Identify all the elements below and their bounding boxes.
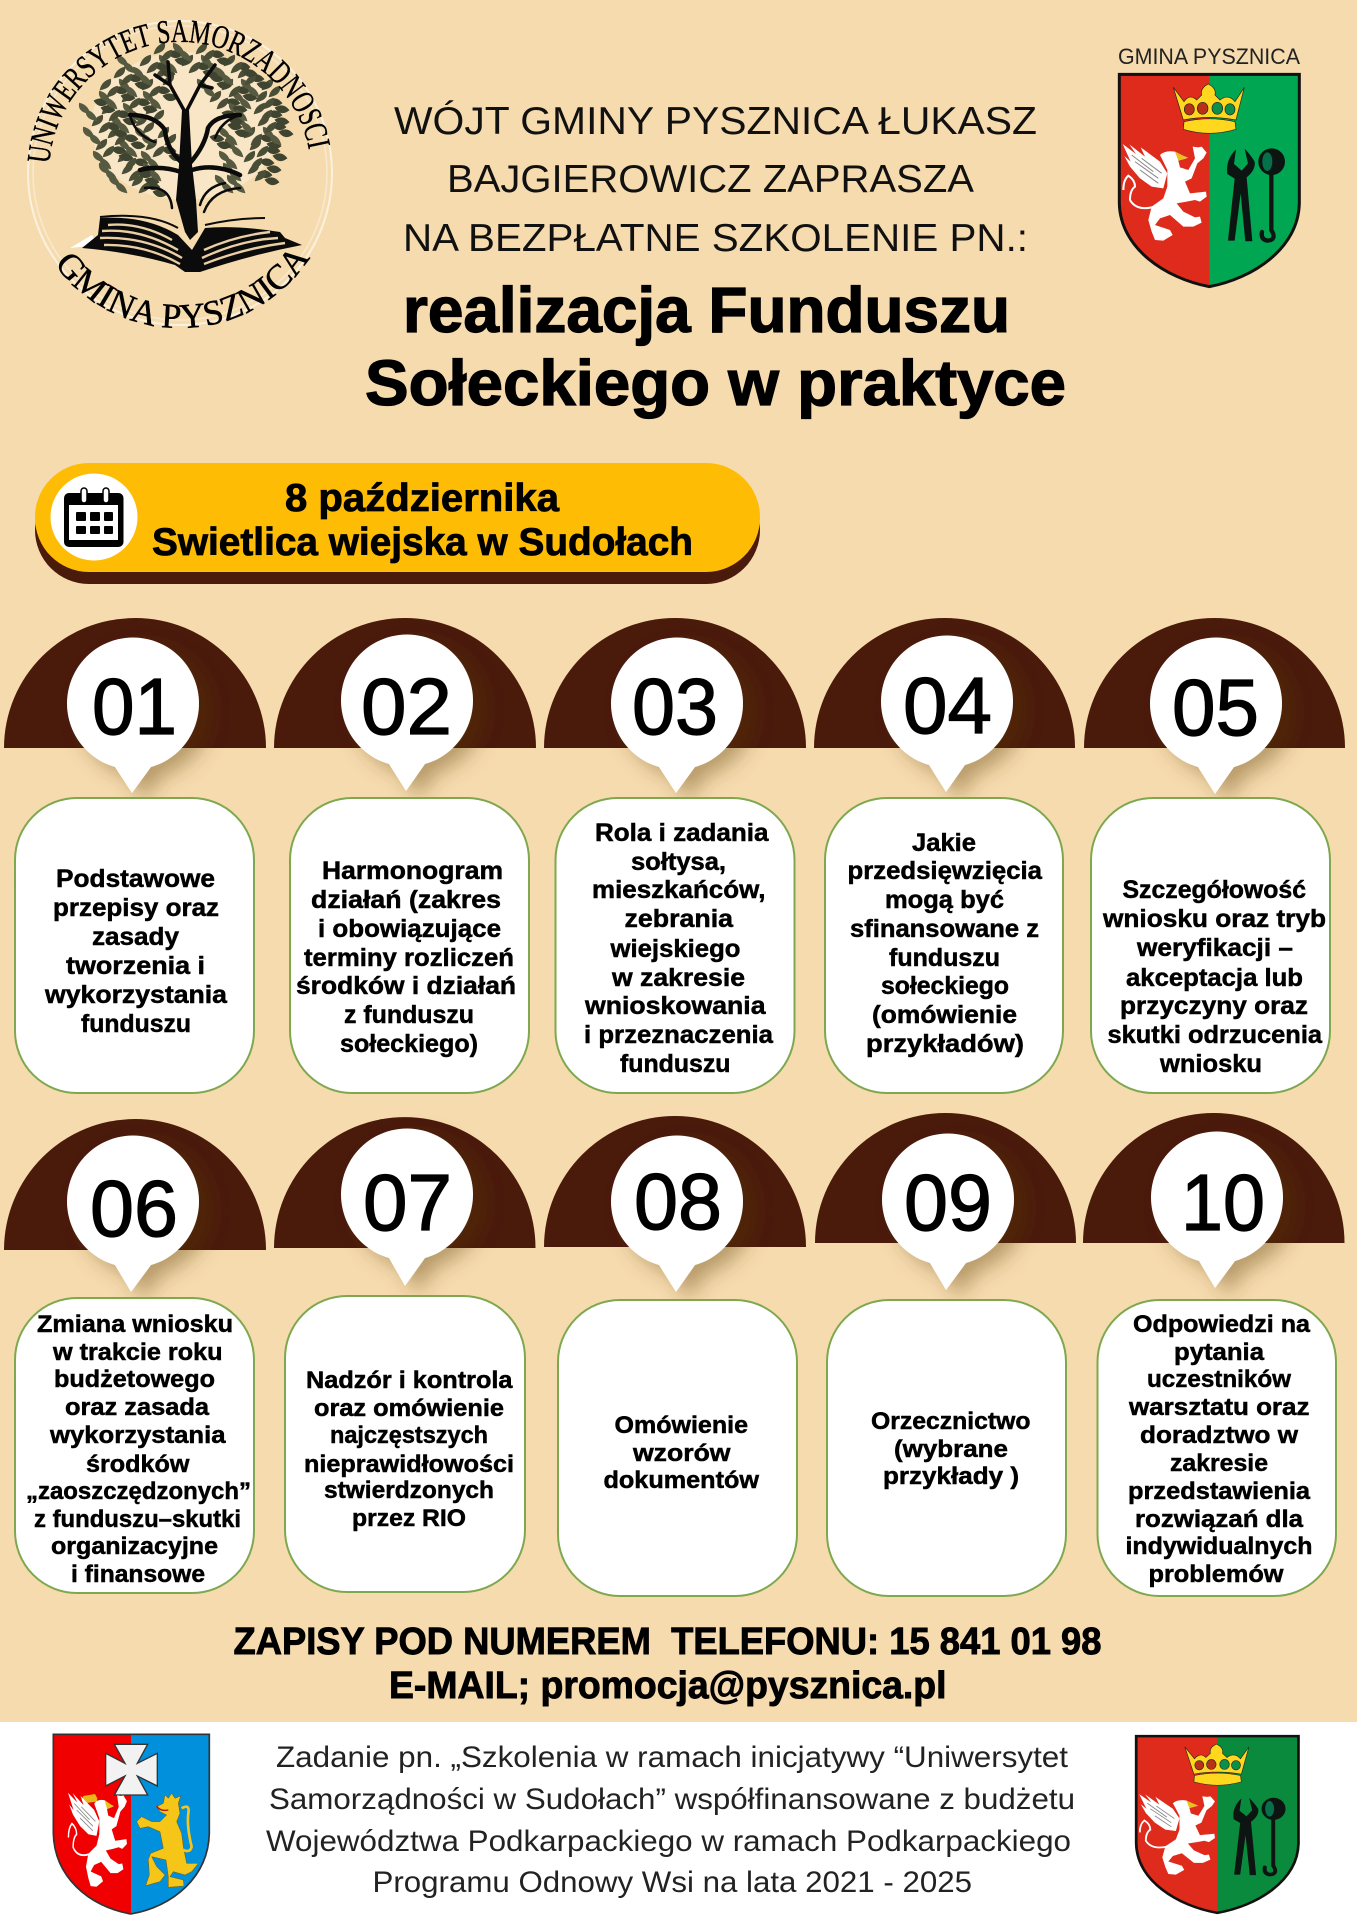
topic 07: 07	[363, 1158, 452, 1247]
co-financing note: Programu Odnowy Wsi na lata 2021 - 2025	[372, 1866, 972, 1899]
tree trunk and branches	[130, 62, 240, 240]
title: realizacja Funduszu	[403, 274, 1010, 346]
topic 10: przedstawienia	[1128, 1478, 1311, 1505]
topic 07	[274, 1117, 536, 1592]
contact details: ZAPISY POD NUMEREM TELEFONU: 15 841 01 98	[234, 1621, 1102, 1663]
topic 02: sołeckiego)	[340, 1030, 478, 1058]
topic 07: stwierdzonych	[324, 1477, 494, 1504]
topic 06: wykorzystania	[49, 1422, 226, 1449]
topic 03: 03	[632, 662, 718, 751]
topic 04: sołeckiego	[881, 972, 1009, 1000]
tree canopy	[80, 44, 292, 200]
topic 05: wniosku	[1159, 1050, 1262, 1078]
date and place banner	[35, 463, 760, 584]
topic 06: organizacyjne	[51, 1533, 218, 1560]
topic 09: przykłady )	[883, 1463, 1019, 1490]
topic 09	[815, 1113, 1076, 1596]
topic 02: Harmonogram	[322, 857, 503, 885]
contact details: E-MAIL; promocja@pysznica.pl	[389, 1665, 946, 1707]
topic 07: nieprawidłowości	[304, 1451, 514, 1478]
crest: Gmina Pysznica: GMINA PYSZNICA	[1118, 44, 1300, 69]
title	[365, 274, 1066, 419]
topic 03: Rola i zadania	[595, 819, 770, 847]
topic 02: 02	[361, 662, 452, 751]
topic 05: 05	[1172, 663, 1259, 752]
topic 06: z funduszu–skutki	[34, 1506, 241, 1533]
topic 10: pytania	[1174, 1339, 1265, 1366]
co-financing note: Samorządności w Sudołach” współfinansowane z budżetu	[269, 1783, 1075, 1816]
topic 05: wniosku oraz tryb	[1102, 905, 1326, 933]
crest: Gmina Pysznica	[1118, 44, 1300, 287]
topic 05: akceptacja lub	[1126, 964, 1303, 992]
topic 04: funduszu	[889, 944, 1000, 972]
topic 10: zakresie	[1170, 1450, 1268, 1477]
topic 03: i przeznaczenia	[584, 1021, 774, 1049]
topic 04: Jakie	[912, 829, 976, 857]
topic 03: sołtysa,	[631, 848, 726, 876]
topic 07: najczęstszych	[330, 1422, 488, 1449]
heading: invitation: NA BEZPŁATNE SZKOLENIE PN.:	[403, 217, 1028, 260]
topic 01	[4, 618, 266, 1093]
topic 04: (omówienie	[872, 1001, 1017, 1029]
topic 05: skutki odrzucenia	[1108, 1021, 1323, 1049]
date and place banner: Swietlica wiejska w Sudołach	[152, 521, 693, 564]
topic 10: 10	[1181, 1158, 1265, 1247]
topic 09: 09	[904, 1158, 992, 1247]
topic 09: Orzecznictwo	[871, 1408, 1030, 1435]
topic 10: warsztatu oraz	[1128, 1394, 1310, 1421]
heading: invitation: BAJGIEROWICZ ZAPRASZA	[447, 158, 974, 201]
logo: Uniwersytet Samorządności	[27, 20, 333, 328]
topic 10	[1083, 1113, 1344, 1596]
topic 06: i finansowe	[71, 1561, 205, 1588]
topic 10: problemów	[1148, 1561, 1284, 1588]
co-financing note: Województwa Podkarpackiego w ramach Podkarpackiego	[266, 1825, 1071, 1858]
date and place banner: 8 października	[285, 477, 559, 520]
topic 06: środków	[86, 1451, 190, 1478]
topic 02	[274, 618, 536, 1093]
topic 01: tworzenia i	[66, 952, 205, 980]
logo ring text: GMINA PYSZNICA	[58, 252, 310, 328]
topic 03: w zakresie	[611, 964, 745, 992]
topic 03: mieszkańców,	[592, 876, 766, 904]
topic 08	[544, 1116, 806, 1596]
topic 08: wzorów	[632, 1440, 731, 1467]
topic 01: przepisy oraz	[53, 894, 219, 922]
topic 07: oraz omówienie	[314, 1395, 504, 1422]
heading: invitation: WÓJT GMINY PYSZNICA ŁUKASZ	[394, 100, 1037, 143]
topic 10: Odpowiedzi na	[1133, 1311, 1311, 1338]
topic 07: przez RIO	[352, 1505, 466, 1532]
topic 06: „zaoszczędzonych”	[26, 1478, 251, 1505]
topic 02: i obowiązujące	[318, 915, 501, 943]
topic 02: działań (zakres	[311, 886, 501, 914]
topic 10: rozwiązań dla	[1135, 1506, 1304, 1533]
topic 08: 08	[634, 1157, 722, 1246]
topic 08: Omówienie	[614, 1412, 748, 1439]
topic 06: w trakcie roku	[52, 1339, 222, 1366]
topic 06: oraz zasada	[65, 1394, 210, 1421]
crest: Województwo Podkarpackie	[53, 1734, 209, 1914]
topic 01: Podstawowe	[56, 865, 215, 893]
topic 10: doradztwo w	[1140, 1422, 1298, 1449]
topic 04: 04	[903, 661, 992, 750]
topic 04: przedsięwzięcia	[848, 857, 1043, 885]
topic 05	[1084, 618, 1345, 1093]
topic 03: wnioskowania	[584, 992, 767, 1020]
heading: invitation	[394, 100, 1037, 260]
topic 01: funduszu	[81, 1010, 191, 1038]
logo ring text: UNIWERSYTET SAMORZADNOSCI	[27, 20, 330, 161]
topic 05: przyczyny oraz	[1120, 992, 1308, 1020]
topic 02: terminy rozliczeń	[304, 944, 514, 972]
contact details	[234, 1621, 1102, 1707]
topic 01: 01	[92, 662, 177, 751]
topic 10: uczestników	[1147, 1366, 1291, 1393]
topic 06: 06	[90, 1164, 178, 1253]
topic 04: mogą być	[885, 886, 1004, 914]
topic 04	[814, 618, 1075, 1093]
topic 07: Nadzór i kontrola	[306, 1367, 513, 1394]
topic 08: dokumentów	[604, 1467, 759, 1494]
topic 10: indywidualnych	[1126, 1533, 1312, 1560]
topic 05: weryfikacji –	[1136, 934, 1293, 962]
title: Sołeckiego w praktyce	[365, 347, 1066, 419]
crest: Gmina Pysznica small	[1136, 1736, 1298, 1913]
open book	[70, 216, 302, 272]
topic 03: zebrania	[624, 905, 734, 933]
topic 02: środków i działań	[296, 972, 516, 1000]
topic 04: sfinansowane z	[850, 915, 1039, 943]
footer panel	[0, 1722, 1357, 1920]
topic 06	[4, 1119, 266, 1593]
topic 01: zasady	[92, 923, 179, 951]
topic 05: Szczegółowość	[1122, 876, 1306, 904]
topic 02: z funduszu	[344, 1001, 474, 1029]
icon: calendar	[50, 474, 138, 560]
co-financing note	[266, 1741, 1075, 1899]
topic 03: wiejskiego	[609, 935, 740, 963]
co-financing note: Zadanie pn. „Szkolenia w ramach inicjatywy “Uniwersytet	[276, 1741, 1069, 1774]
topic 06: budżetowego	[54, 1366, 215, 1393]
topic 03	[544, 618, 806, 1093]
topic 01: wykorzystania	[44, 981, 228, 1009]
topic 04: przykładów)	[866, 1030, 1024, 1058]
topic 06: Zmiana wniosku	[37, 1311, 233, 1338]
topic 09: (wybrane	[894, 1436, 1008, 1463]
topic 03: funduszu	[620, 1050, 730, 1078]
logo ring text	[27, 20, 330, 328]
